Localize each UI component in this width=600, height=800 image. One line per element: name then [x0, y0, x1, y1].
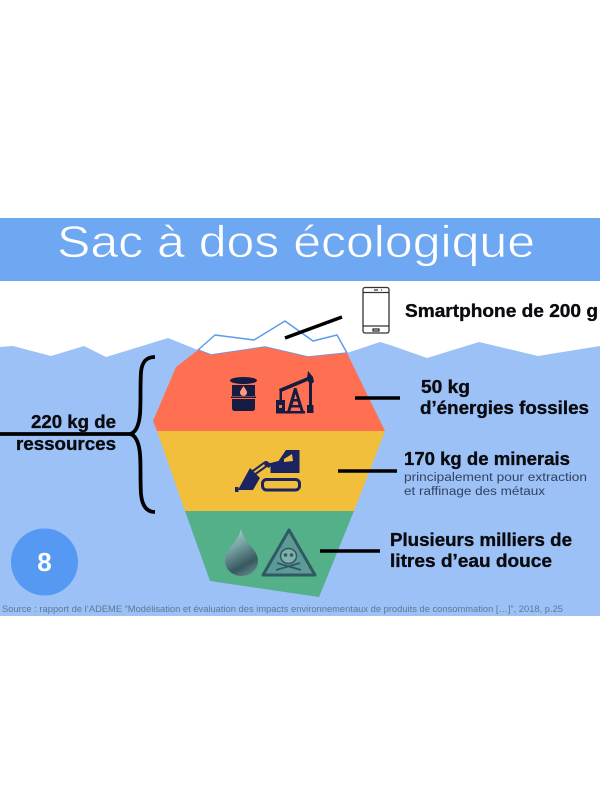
connector: minerals: [338, 469, 397, 473]
connector: fresh water: [320, 549, 380, 553]
label: total resources: 220 kg de: [31, 412, 116, 432]
label: total resources: ressources: [16, 434, 116, 454]
skull and crossbones: [276, 548, 301, 570]
label: fresh water: Plusieurs milliers de: [390, 530, 572, 550]
water background: [0, 338, 600, 616]
page number badge: [11, 528, 78, 596]
iceberg: [153, 321, 385, 597]
iceberg tip: smartphone: [198, 321, 347, 357]
label: fossil energies: d’énergies fossiles: [420, 398, 589, 418]
label: smartphone: Smartphone de 200 g: [405, 301, 598, 321]
icon: bulldozer: [235, 450, 300, 492]
label: fresh water: litres d’eau douce: [390, 551, 552, 571]
bracket: total resources: [0, 357, 155, 512]
icon: oil pump: [276, 371, 314, 414]
icon: water drop: [225, 529, 258, 576]
source note: Source : rapport de l’ADEME “Modélisation et évaluation des impacts environnementaux de produits de consommation […]”, 2018, p.25: [2, 604, 563, 615]
label: fossil energies: 50 kg: [421, 377, 470, 397]
iceberg layer: fresh water: [185, 511, 354, 597]
title band: [0, 218, 600, 281]
label: minerals: [404, 449, 587, 498]
iceberg layer: fossil energies: [153, 347, 385, 431]
label: minerals: principalement pour extraction: [404, 472, 587, 484]
label: minerals: et raffinage des métaux: [404, 486, 545, 498]
connector: fossil energies: [355, 396, 400, 400]
label: fossil energies: [420, 377, 589, 418]
iceberg layer: minerals: [157, 431, 385, 511]
icon: smartphone: [363, 288, 389, 333]
connector: smartphone: [285, 317, 342, 338]
label: minerals: 170 kg de minerais: [404, 449, 570, 469]
icon: toxic hazard triangle: [263, 530, 315, 575]
title: Sac à dos écologique: [57, 218, 535, 267]
label: total resources: [16, 412, 116, 454]
page number badge: 8: [37, 547, 52, 577]
label: fresh water: [390, 530, 572, 571]
icon: oil barrel: [230, 377, 257, 411]
